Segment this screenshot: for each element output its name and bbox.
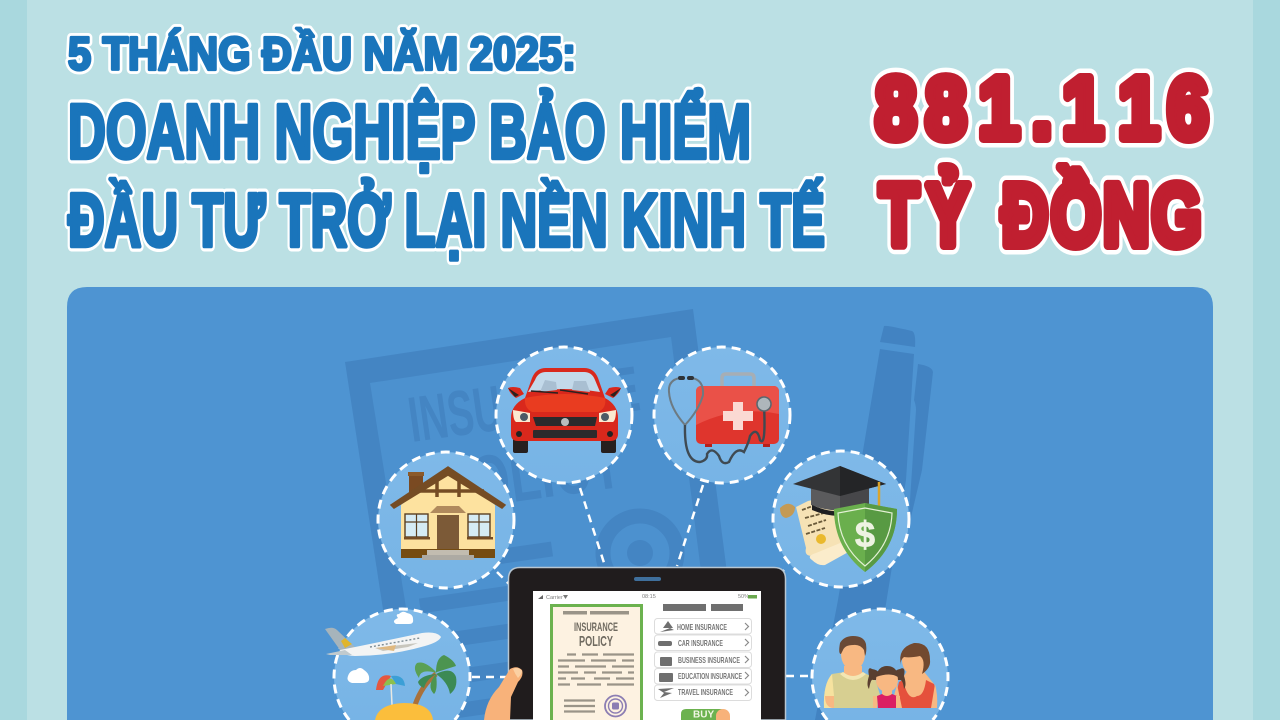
status bar [538,594,757,599]
insurance menu: BUSINESS INSURANCE [678,655,740,665]
icon: car [496,347,632,483]
amount unit: TỶ [879,168,969,264]
buy button [681,709,730,720]
tablet device [508,568,786,720]
watermark: policy document: INSURANCE [404,352,644,456]
insurance menu: TRAVEL INSURANCE [678,687,733,697]
title line 2 [68,88,751,175]
amount unit: ĐỒNG [1002,168,1202,264]
insurance menu: EDUCATION INSURANCE [678,671,742,681]
title line 1: 5 THÁNG ĐẦU NĂM 2025: [68,28,576,80]
title line 3 [68,178,825,262]
icon: education and savings [773,451,909,587]
heading: title [68,28,825,262]
icon: education and savings: $ [855,514,875,555]
amount unit [879,168,1202,264]
icon: family [812,609,948,720]
amount number: 881.116 [875,60,1209,157]
title line 2: DOANH NGHIỆP BẢO HIỂM [68,88,751,175]
policy document: POLICY [579,633,613,650]
insurance menu [654,604,752,700]
policy document: INSURANCE [574,622,618,634]
status bar: 08:15 [642,594,656,600]
title line 3: ĐẦU TƯ TRỞ LẠI NỀN KINH TẾ [68,178,825,262]
title line 1: 5 THÁNG ĐẦU NĂM 2025: [68,28,576,80]
icon: hand [484,667,522,720]
status bar: Carrier [546,595,563,601]
icon: house [378,452,514,588]
amount number: 881.116 [875,60,1209,157]
icon: medical kit [654,347,790,483]
callout: total amount [875,60,1209,264]
connector lines [472,485,812,677]
status bar: 50% [738,594,749,600]
title line 2: DOANH NGHIỆP BẢO HIỂM [68,88,751,175]
watermark: policy document: POLICY [433,423,627,528]
icon: travel [325,609,470,720]
policy document [550,604,643,720]
insurance menu: CAR INSURANCE [678,638,723,648]
amount unit: ĐỒNG [1002,168,1202,264]
title line 3: ĐẦU TƯ TRỞ LẠI NỀN KINH TẾ [68,178,825,262]
insurance menu: HOME INSURANCE [677,622,727,632]
amount unit: TỶ [879,168,969,264]
watermark: pen [815,326,933,720]
tablet screen [533,591,761,720]
panel: insurance illustration [67,287,1213,720]
watermark: policy document [345,309,746,720]
